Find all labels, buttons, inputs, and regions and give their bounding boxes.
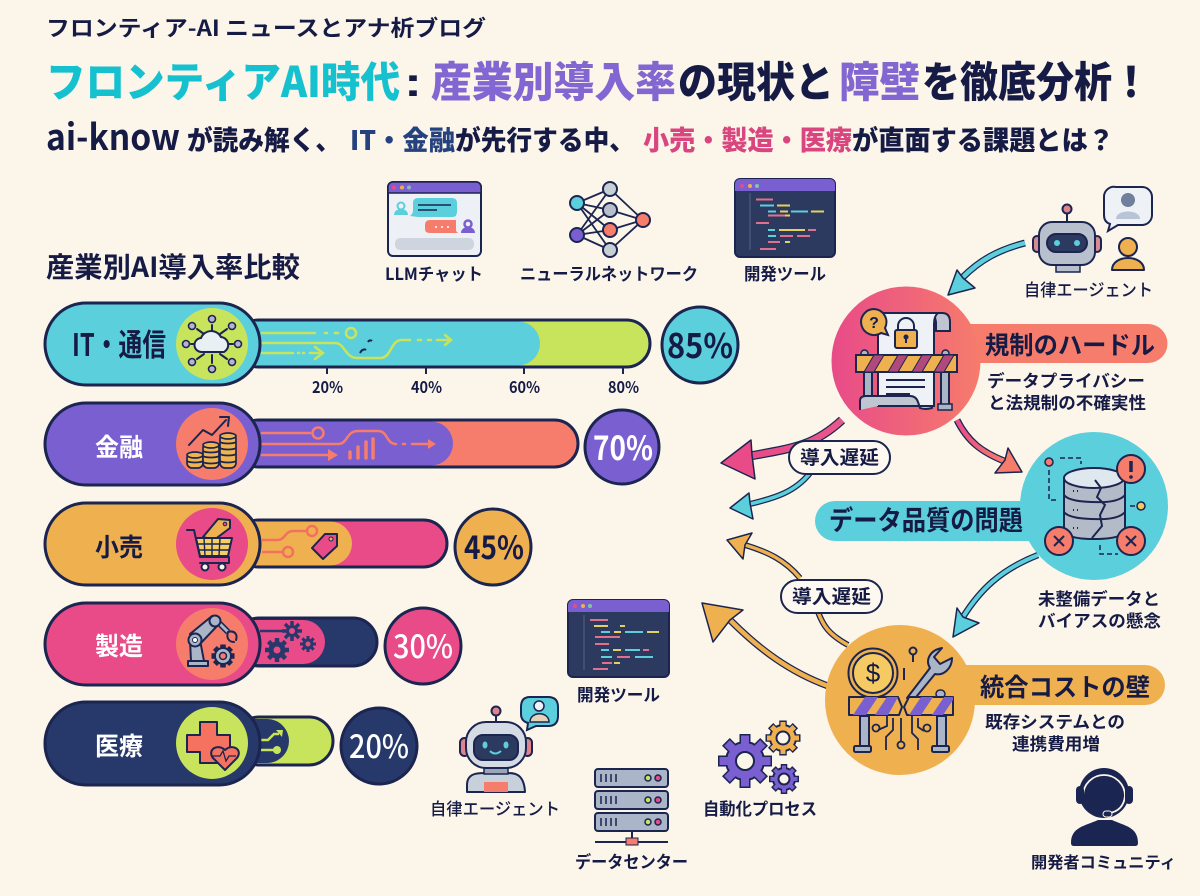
pill: manufacturing — [45, 603, 260, 685]
label: dev tool lower: 開発ツール — [577, 681, 660, 706]
text: regulation detail: と法規制の不確実性 — [988, 389, 1146, 414]
panel: integration cost — [825, 625, 1165, 775]
icon: locked scroll barrier: ? — [869, 315, 879, 332]
text: cost detail: 既存システムとの — [985, 708, 1125, 733]
badge: delay 2 — [781, 580, 882, 613]
pill: manufacturing: 製造 — [95, 627, 143, 663]
icon: medical cross — [176, 707, 248, 779]
label: dev tool: 開発ツール — [744, 260, 826, 285]
label: autonomous agent top: 自律エージェント — [1024, 276, 1153, 301]
icon: LLM chat — [388, 182, 481, 256]
icon: automation gears — [718, 720, 800, 794]
icon: developer community headset — [1071, 768, 1138, 846]
badge: delay 1: 導入遅延 — [800, 443, 879, 470]
gear: amber — [766, 720, 800, 756]
main title — [46, 49, 1150, 110]
bar chart: industry adoption — [45, 303, 738, 785]
pill: retail — [45, 503, 260, 585]
icon: robot arm — [176, 608, 248, 680]
text: cost detail — [985, 708, 1125, 755]
main title: 産業別導入率 — [431, 49, 676, 110]
main title: を徹底分析！ — [922, 49, 1150, 110]
label: LLM chat: LLMチャット — [385, 260, 483, 285]
row: manufacturing 30% — [45, 603, 461, 685]
value: 70% — [585, 410, 659, 484]
icon: coins chart — [176, 408, 248, 480]
text: regulation detail — [987, 367, 1146, 414]
pill: regulation: 規制のハードル — [985, 326, 1155, 362]
badge: delay 1 — [789, 441, 890, 474]
row: finance 70% — [45, 403, 659, 485]
pill: retail: 小売 — [95, 528, 143, 564]
label: data center: データセンター — [575, 848, 688, 873]
text: cost detail: 連携費用増 — [1012, 730, 1100, 755]
axis ticks: 40% — [411, 374, 442, 398]
icon: broken database — [1045, 455, 1145, 555]
icon: locked scroll barrier — [856, 309, 957, 410]
axis ticks: 60% — [509, 374, 540, 398]
text: regulation detail: データプライバシー — [987, 367, 1145, 392]
icon: bar gears — [265, 621, 316, 662]
pill: finance: 金融 — [95, 428, 143, 464]
label: developer community: 開発者コミュニティ — [1031, 849, 1176, 873]
value: 45% — [455, 509, 531, 585]
icon: robot lower — [460, 697, 558, 792]
pill: healthcare: 医療 — [95, 727, 143, 763]
value: 30% — [385, 608, 461, 684]
value: 20% — [341, 708, 417, 784]
value: 85% — [662, 307, 738, 383]
text: data detail: 未整備データと — [1038, 585, 1160, 610]
icon: dev tool window — [735, 179, 835, 257]
icon: coin wrench barrier: $ — [866, 658, 881, 688]
subtitle: が読み解く、 — [187, 119, 341, 158]
text: data detail: バイアスの懸念 — [1038, 607, 1161, 632]
arrow: big amber — [702, 603, 828, 686]
arrow: coral regulation to data — [957, 420, 1022, 473]
arrow: agent to regulation — [948, 243, 1025, 295]
main title: フロンティアAI時代 — [46, 49, 400, 110]
value: 30%: 30% — [393, 622, 453, 668]
subtitle: ai-know — [46, 109, 180, 161]
gear: small purple — [769, 764, 799, 794]
subtitle: 小売・製造・医療 — [643, 119, 852, 158]
arrow: teal delay — [730, 473, 810, 519]
value: 70%: 70% — [593, 422, 653, 470]
subtitle: が直面する課題とは？ — [852, 119, 1114, 158]
badge: delay 2: 導入遅延 — [792, 582, 871, 609]
axis ticks: 80% — [608, 374, 639, 398]
row: healthcare 20% — [45, 702, 417, 785]
subtitle: IT・金融 — [350, 119, 455, 158]
label: neural network: ニューラルネットワーク — [520, 260, 698, 285]
axis ticks: 20% — [312, 374, 343, 398]
icon: autonomous agent top — [1033, 187, 1152, 272]
arrow: data to cost — [953, 555, 1038, 637]
main title: : — [404, 59, 422, 105]
icon: shopping cart — [176, 508, 248, 580]
gear: large purple — [718, 734, 772, 788]
main title: の現状と — [678, 49, 834, 110]
panel: regulation hurdle — [832, 286, 1168, 436]
pill: finance — [45, 403, 260, 485]
chart heading: 産業別AI導入率比較 — [46, 246, 300, 286]
arrow: pink delay — [721, 420, 842, 479]
row: retail 45% — [45, 503, 531, 585]
text: data detail — [1038, 585, 1161, 632]
value: 45%: 45% — [464, 523, 524, 569]
subtitle: が先行する中、 — [455, 119, 635, 158]
icon: neural network — [570, 182, 650, 257]
panel: data quality — [815, 432, 1168, 632]
value: 85%: 85% — [667, 319, 733, 368]
icon: cloud network — [176, 308, 248, 380]
pill: data quality: データ品質の問題 — [829, 499, 1023, 538]
pill: healthcare — [45, 702, 260, 785]
pill: IT — [45, 303, 260, 385]
axis ticks — [312, 367, 639, 398]
icon: server rack — [595, 769, 668, 845]
pill: IT: IT・通信 — [72, 320, 166, 365]
label: robot lower: 自律エージェント — [430, 795, 560, 820]
value: 20%: 20% — [349, 722, 409, 768]
icon: coin wrench barrier — [848, 648, 953, 752]
pill: cost: 統合コストの壁 — [980, 668, 1150, 704]
blog name: フロンティア-AI ニュースとアナ析ブログ — [46, 11, 486, 43]
arrow: amber delay — [727, 533, 848, 645]
label: automation process: 自動化プロセス — [703, 795, 817, 820]
icon: dev tool lower — [568, 600, 669, 677]
subtitle — [46, 109, 1114, 161]
row: IT 85% — [45, 303, 738, 398]
main title: 障壁 — [839, 49, 920, 110]
